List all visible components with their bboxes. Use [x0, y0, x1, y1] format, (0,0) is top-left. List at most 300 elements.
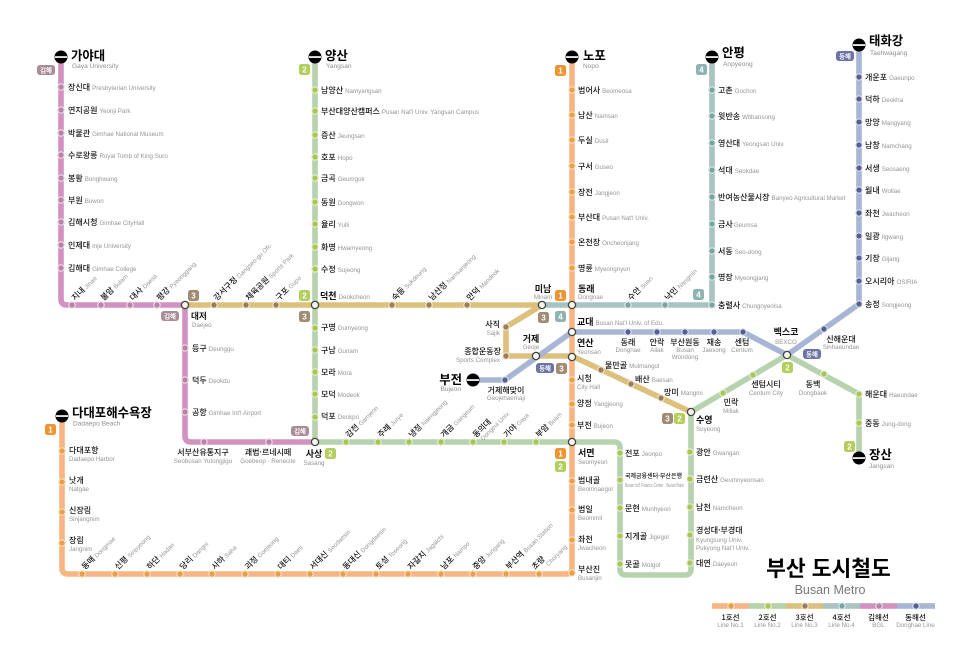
station: 시청: [569, 373, 600, 391]
track: line 1: [62, 57, 572, 574]
station: 괘법·르네시떼: [240, 439, 296, 465]
station: 오시리아: 오시리아 OSIRIA: [865, 276, 918, 287]
station: 장림: [59, 535, 92, 553]
interchange: 수영: Suyeong: [696, 426, 721, 433]
line 4 (teal): [542, 57, 846, 311]
station: 센텀시티: [749, 372, 784, 397]
station: 종합운동장: 종합운동장: [464, 346, 502, 357]
interchange: 수영: [687, 408, 721, 433]
line badges: [37, 51, 855, 472]
station: 재송: [702, 329, 726, 354]
station: 장전: 장전 Jangjeon: [578, 187, 620, 198]
terminus: 가야대: Gaya University: [72, 63, 119, 70]
legend: 3호선: Line No.3: [791, 622, 818, 629]
interchange: 사상: Sasang: [304, 460, 325, 467]
terminus: 노포: 노포: [583, 46, 606, 64]
station: 당리: 당리Dangni: [177, 539, 211, 572]
station: 남산정: 남산정Namsanjeong: [426, 251, 479, 303]
station: 초량: [529, 536, 569, 577]
station: 기장: 기장 Gijang: [865, 253, 900, 264]
station: 경성대·부경대: 경성대·부경대: [696, 525, 743, 536]
station: 좌천: 좌천: [578, 534, 593, 545]
badge: 2: [299, 290, 310, 301]
interchange: 사상: 사상: [306, 447, 323, 460]
interchange: 서면: [568, 438, 608, 466]
badge: 김해: [161, 311, 179, 321]
station: 사직: 사직: [485, 319, 500, 330]
station: 개운포: 개운포 Gaeunpo: [865, 72, 915, 83]
badge: 2: [555, 461, 566, 472]
station: 동의대: Dongeui Univ.: [480, 410, 512, 442]
station: 괴정: 괴정Goejeong: [242, 533, 281, 572]
track: line 2: [315, 57, 859, 575]
station: 대사: 대사Daesa: [127, 270, 160, 303]
interchange: 대저: [181, 301, 212, 329]
station: 동래 (Donghae): 동래: [621, 337, 635, 348]
station: 일광: 일광 Ilgwang: [865, 231, 904, 242]
station: 동백: [799, 371, 828, 397]
legend: 동해선: 동해선: [905, 612, 926, 623]
station: 구서: 구서 Guseo: [578, 161, 614, 172]
badge: 3: [188, 290, 199, 301]
badge: 2: [299, 64, 310, 75]
station: 신해운대: Sinhaeundae: [823, 344, 860, 351]
station: 사하: 사하Saha: [209, 542, 240, 572]
station: 석대: 석대 Seokdae: [718, 165, 760, 176]
station: 다대포항: [59, 445, 115, 463]
station: 장림: 장림: [69, 535, 84, 546]
terminus: 다대포해수욕장: 다대포해수욕장: [72, 403, 152, 421]
station: 서부산유통지구: Seobusan Yutongjigu: [174, 458, 233, 465]
badge: 2: 2: [302, 292, 307, 300]
badge: 3: 3: [302, 312, 307, 322]
legend: 1호선: [712, 603, 749, 629]
station: 동의대: 동의대: [470, 417, 494, 440]
station: 부산진: Busanjin: [578, 575, 602, 582]
station: 금사: 금사Geumsa: [718, 219, 758, 230]
legend: 4호선: [823, 603, 860, 629]
station: 부산대양산캠퍼스: 부산대양산캠퍼스 Pusan Nat'l Univ. Yangsan Campus: [321, 106, 479, 117]
badge: 2: [325, 448, 336, 459]
station: 좌천: [569, 534, 606, 552]
station: 감전: 감전Gamjeon: [343, 402, 381, 440]
terminus: 태화강: [852, 31, 908, 57]
interchange: 거제: 거제: [523, 332, 539, 345]
station: 낫개: [59, 475, 90, 493]
station: 부산원동: Busan: [676, 347, 694, 354]
station: 김해시청: 김해시청 Gimhae CityHall: [68, 217, 144, 228]
terminus: 양산: 양산: [325, 46, 348, 64]
legend: 동해선: Donghae Line: [896, 622, 935, 629]
badge: 1: [555, 290, 566, 301]
station: 민락: 민락: [724, 397, 739, 408]
badge: 4: 4: [696, 290, 701, 300]
station: 동백: 동백: [806, 379, 820, 390]
station: 냉정: 냉정Naengjeong: [406, 397, 450, 440]
interchange: 벡스코: 벡스코: [774, 325, 798, 338]
title: 부산 도시철도: [766, 552, 891, 583]
interchange: 교대: [568, 315, 664, 336]
badge: 1: [555, 65, 566, 76]
station: 문현: 문현 Munhyeon: [625, 503, 671, 514]
station: 덕포: 덕포 Deokpo: [321, 411, 360, 422]
station: 호포: 호포 Hopo: [321, 152, 353, 163]
interchange: 덕천: [311, 289, 370, 309]
badge: 2: 2: [785, 364, 790, 372]
badge: 4: 4: [558, 312, 563, 322]
station: 경성대·부경대: Kyungsung Univ.: [696, 537, 743, 544]
legend: 김해선: BGL: [872, 622, 885, 629]
station: 서생: 서생 Seosaeng: [865, 163, 910, 174]
station: 초량: 초량: [529, 553, 548, 572]
badge: 동해: [536, 363, 554, 373]
interchange: 연산: 연산: [577, 336, 594, 349]
terminus: 노포: [566, 46, 606, 70]
badge: 2: [782, 362, 793, 373]
badge: 동해: [803, 349, 821, 359]
station: 동래 (Donghae): Dongnae: [615, 347, 641, 354]
terminus: 장산: Jangsan: [869, 463, 894, 470]
station: 범일: [569, 504, 602, 522]
station: 신평: 신평Sinpyeong: [112, 531, 153, 572]
badge: 김해: 김해: [294, 426, 306, 436]
station: 명륜: 명륜 Myeongnyun: [578, 263, 631, 274]
badge: 3: 3: [541, 314, 546, 322]
station: 부산진: [569, 564, 602, 582]
terminus: 가야대: [54, 46, 119, 70]
station: 체육공원: 체육공원Sports Park: [243, 250, 297, 303]
station: 모덕: 모덕 Modeok: [321, 389, 361, 400]
badge: 1: [45, 424, 56, 435]
station: 봉황: 봉황 Bonghwang: [68, 173, 118, 184]
track: Donghae line: [473, 45, 859, 380]
station: 센텀: 센텀: [735, 337, 749, 348]
station: 국제금융센터·부산은행: Busan Int'l Finance Center · Busan Bank: [625, 483, 684, 489]
legend: 3호선: 3호선: [795, 612, 814, 623]
station: 구남: 구남 Gunam: [321, 345, 358, 356]
station: 동매: 동매Dongmae: [79, 533, 118, 572]
station: 신해운대: [821, 326, 860, 351]
station: 범일: Beommil: [578, 515, 602, 522]
station: 다대포항: Dadaepo Harbor: [69, 456, 115, 463]
interchange: 거제: [523, 332, 540, 360]
interchange: 미남: Minam: [534, 294, 552, 301]
station: 신장림: Sinjangnim: [69, 516, 100, 523]
station: 인제대: 인제대 Inje University: [68, 240, 132, 251]
badge: 3: [556, 363, 567, 374]
terminus: 태화강: Taehwagang: [870, 50, 908, 57]
badge: 동해: 동해: [839, 52, 851, 60]
station: 화명: 화명 Hwamyeong: [321, 242, 373, 253]
interchange: 동래: 동래: [578, 282, 595, 295]
badge: 김해: [37, 65, 55, 75]
station: 중동: 중동 Jung-dong: [865, 418, 912, 429]
station: 거제해맞이: Geojehaemaji: [487, 395, 525, 402]
station: 동대신: 동대신Dongdaesin: [340, 524, 389, 572]
track: line 4: [542, 57, 712, 305]
interchange: 서면: Seomyeon: [578, 459, 608, 466]
badge: 1: [555, 448, 566, 459]
station: 동래 (Donghae): [615, 329, 641, 354]
station: 경성대·부경대: Pukyong Nat'l Univ.: [696, 545, 750, 552]
station: 가야: 가야Gaya: [501, 410, 532, 440]
badge: 3: [538, 312, 549, 323]
station: 평강: 평강Pyeonggang: [154, 259, 199, 303]
station: 대연: 대연 Daeyeon: [696, 558, 738, 569]
station: 김해대: 김해대 Gimhae College: [68, 263, 137, 274]
line 3 (tan): [185, 240, 703, 412]
legend: [712, 603, 935, 629]
station: 서동: 서동 Seo-dong: [718, 246, 762, 257]
station: 서부산유통지구: [174, 439, 233, 465]
station: 지게골: 지게골 Jigegol: [625, 531, 669, 542]
station: 송정: 송정 Songjeong: [865, 299, 912, 310]
interchange: 벡스코: BEXCO: [775, 339, 797, 346]
station: 범어사: 범어사 Beomeosa: [578, 85, 632, 96]
badge: 3: [662, 413, 673, 424]
station: 구명: 구명 Gumyeong: [321, 322, 369, 333]
station: 금련산: 금련산 Geumnyeonsan: [696, 474, 764, 485]
station: 공항: 공항 Gimhae Int'l Airport: [192, 407, 261, 418]
title: Busan Metro: [795, 583, 865, 597]
station: 만덕: 만덕Mandeok: [464, 265, 503, 303]
station: 남산: 남산 Namsan: [578, 110, 618, 121]
station: 못골: 못골 Motgol: [625, 559, 660, 570]
station: 장림: Jangnim: [69, 546, 92, 553]
station: 낫개: 낫개: [69, 475, 84, 486]
station: 재송: 재송: [707, 337, 721, 348]
station: 시청: 시청: [577, 373, 592, 384]
station: 남천: 남천 Namcheon: [696, 502, 743, 513]
station: 부전: 부전 Bujeon: [577, 420, 614, 431]
station: 부산원동: [670, 329, 700, 361]
station: 낙민: 낙민Nangmin: [662, 266, 700, 303]
station: 부원: 부원 Buwon: [68, 195, 104, 206]
badge: 1: 1: [558, 66, 563, 76]
station: 전포: 전포 Jeonpo: [625, 448, 663, 459]
interchange: 벡스코: [774, 325, 798, 359]
legend: 1호선: Line No.1: [717, 622, 744, 629]
station: 센텀시티: 센텀시티: [751, 379, 781, 390]
station: 좌천: Jwacheon: [578, 545, 606, 552]
station: 안락: 안락: [650, 337, 665, 348]
interchange: 교대: 교대 Busan Nat'l Univ. of Edu.: [577, 315, 664, 328]
terminus: 태화강: 태화강: [869, 31, 904, 49]
badge: 4: 4: [699, 66, 704, 74]
station: 센텀: Centum: [731, 347, 753, 354]
badge: 동해: 동해: [539, 364, 551, 372]
badge: 2: 2: [558, 462, 563, 472]
interchange: 서면: 서면: [578, 446, 595, 459]
station: 다대포항: 다대포항: [69, 445, 99, 456]
badge: 4: [555, 311, 566, 322]
station: 구포: 구포Gupo: [273, 272, 304, 303]
title: [766, 552, 891, 597]
badge: 3: [299, 311, 310, 322]
interchange: 연산: [568, 336, 601, 361]
badge: 3: 3: [665, 414, 670, 424]
legend: 2호선: [749, 603, 786, 629]
station: 고촌: 고촌 Gochon: [718, 85, 757, 96]
station: 부산대: 부산대 Pusan Nat'l Univ.: [578, 212, 649, 223]
station: 충렬사: 충렬사 Chungnyeolsa: [718, 300, 782, 311]
badge: 2: 2: [302, 66, 307, 74]
track: line 3: [185, 305, 691, 412]
station: 부산원동: 부산원동: [670, 337, 700, 348]
station: 국제금융센터·부산은행: [617, 471, 684, 489]
station: 금곡: 금곡 Geumgok: [321, 173, 365, 184]
station: 국제금융센터·부산은행: 국제금융센터·부산은행: [625, 471, 682, 480]
station: 주례: 주례Jurye: [375, 409, 406, 440]
interchange: 미남: 미남: [535, 282, 552, 295]
station: 망미: 망미 Mangmi: [664, 387, 703, 398]
line 1 (orange): [59, 57, 649, 582]
station: 범일: 범일: [578, 504, 593, 515]
station: 개금: 개금Gaegeum: [438, 401, 477, 440]
station: 민락: Millak: [723, 408, 740, 415]
station: 수안: 수안Suan: [625, 273, 656, 303]
terminus: 부전: Bujeon: [440, 386, 461, 393]
station: 남창: 남창 Namchang: [865, 140, 912, 151]
terminus: 양산: [308, 46, 352, 70]
station: 좌천: 좌천 Jwacheon: [865, 208, 910, 219]
station: 부암: 부암Buam: [533, 409, 564, 440]
interchange: 수영: 수영: [696, 413, 713, 426]
interchange stations: [181, 282, 798, 467]
interchange: 거제: Geoje: [523, 344, 540, 351]
station: 부산진: 부산진: [578, 564, 600, 575]
station: 종합운동장: Sports Complex: [456, 357, 501, 364]
interchange: 동래: Dongnae: [578, 294, 604, 301]
station: 강서구청: 강서구청Gangseo-gu Ofc.: [211, 240, 275, 303]
badge: 2: 2: [328, 450, 333, 458]
badge: 4: [696, 64, 707, 75]
terminus: 장산: [852, 445, 894, 470]
badge: 3: 3: [191, 292, 196, 300]
station: 반여농산물시장: 반여농산물시장 Banyeo Agricultural Market: [718, 192, 846, 203]
station: 신장림: 신장림: [69, 505, 91, 516]
station: 망미: [658, 387, 703, 401]
station: 부산역: 부산역Busan Station: [503, 520, 556, 572]
terminus: 부전: 부전: [439, 370, 462, 388]
badge: 1: 1: [48, 426, 53, 434]
badge: 김해: [291, 426, 309, 436]
station: 범내골: [569, 475, 613, 493]
badge: 2: 2: [677, 414, 682, 424]
terminus: 안평: Anpyeong: [723, 61, 753, 68]
badge: 2: [844, 441, 855, 452]
badge: 3: 3: [559, 364, 564, 374]
station: 연지공원: 연지공원 Yeonji Park: [68, 105, 131, 116]
station: 괘법·르네시떼: Goebeop · Renecite: [240, 458, 296, 465]
station: 배산: [628, 374, 673, 387]
station: 사직: [485, 319, 509, 337]
interchange: 대저: 대저: [191, 310, 207, 322]
badge: 4: [693, 289, 704, 300]
badge: 동해: [836, 51, 854, 61]
station: 센텀: [731, 329, 753, 354]
badge: 김해: 김해: [164, 312, 176, 320]
station: 두실: 두실 Dusil: [578, 135, 608, 146]
station: 영산대: 영산대 Yeongsan Univ.: [718, 138, 785, 149]
station: 하단: 하단Hadan: [144, 539, 177, 572]
station: 망양: 망양 Mangyang: [865, 117, 911, 128]
station: 배산: 배산 Baesan: [635, 374, 673, 385]
legend: 4호선: 4호선: [832, 612, 851, 623]
station: 박물관: 박물관 Gimhae National Museum: [68, 128, 164, 139]
badge: 1: 1: [558, 450, 563, 458]
terminus: 가야대: 가야대: [71, 46, 105, 64]
station: 안락: Allak: [650, 347, 665, 354]
station: 자갈치: 자갈치Jagalchi: [405, 531, 446, 572]
Donghae line (blue): [473, 45, 918, 402]
station: 부산원동: Wondong: [672, 354, 699, 361]
interchange: 대저: Daejeo: [192, 322, 212, 329]
terminus: 안평: 안평: [722, 43, 745, 61]
terminus: 양산: Yangsan: [326, 63, 352, 70]
legend: 2호선: Line No.2: [754, 622, 781, 629]
station: 시청: City Hall: [577, 384, 600, 391]
station: 수로왕릉: 수로왕릉 Royal Tomb of King Suro: [68, 150, 168, 161]
badge: 2: [674, 413, 685, 424]
terminus: 부전: [439, 370, 480, 393]
terminus: 안평: [706, 43, 753, 68]
interchange: 덕천: 덕천 Deokcheon: [320, 289, 370, 302]
line 2 (green): [312, 57, 918, 575]
station: 덕두: 덕두 Deokdu: [192, 375, 231, 386]
station: 토성: 토성Toseong: [373, 536, 410, 572]
station: 남양산: 남양산 Namyangsan: [321, 85, 382, 96]
track: Gimhae line: [61, 57, 315, 442]
station: 불암: 불암Bulam: [98, 271, 130, 303]
station: 등구: 등구 Deunggu: [192, 343, 234, 354]
legend: 김해선: 김해선: [868, 612, 889, 623]
station: 재송: Jaesong: [702, 347, 726, 354]
station: 대티: 대티Daeti: [275, 542, 305, 572]
legend: 2호선: 2호선: [758, 612, 777, 623]
legend: 3호선: [786, 603, 823, 629]
interchange: 연산: Yeonsan: [577, 349, 601, 356]
terminus stations: [54, 31, 908, 470]
station: 명장: 명장 Myeongjang: [718, 272, 769, 283]
station: 남포: 남포Nampo: [438, 538, 472, 572]
station: 거제해맞이: [487, 377, 525, 402]
station: 경성대·부경대: [687, 525, 750, 552]
station: 민락: [720, 390, 740, 415]
station: 안락: [650, 329, 665, 354]
station: 장신대: 장신대 Presbyterian University: [68, 82, 157, 93]
badge: 동해: 동해: [806, 350, 818, 358]
Gimhae line (pink): [58, 57, 315, 465]
station: 모라: 모라 Mora: [321, 367, 352, 378]
station: 서대신: 서대신Seodaesin: [307, 526, 353, 572]
station: 범내골: 범내골: [578, 475, 600, 486]
station: 괘법·르네시떼: 괘법·르네시떼: [245, 447, 291, 458]
station: 센텀시티: Centum City: [749, 390, 784, 397]
terminus: 다대포해수욕장: Dadaepo Beach: [73, 420, 121, 428]
station: 광안: 광안 Gwangan: [696, 447, 740, 458]
badge: 김해: 김해: [40, 66, 52, 74]
station: 종합운동장: [456, 346, 509, 364]
station: 증산: 증산 Jeungsan: [321, 130, 365, 141]
station: 물만골: 물만골 Mulmangol: [605, 360, 659, 371]
station: 중앙: 중앙Jungang: [470, 535, 507, 572]
station: 초량: Choryang: [545, 544, 569, 568]
terminus: 노포: Nopo: [583, 63, 599, 70]
station: 월내: 월내 Wollae: [865, 185, 901, 196]
station: 덕하: 덕하 Deokha: [865, 94, 904, 105]
station: 동백: Dongbaek: [799, 390, 828, 397]
